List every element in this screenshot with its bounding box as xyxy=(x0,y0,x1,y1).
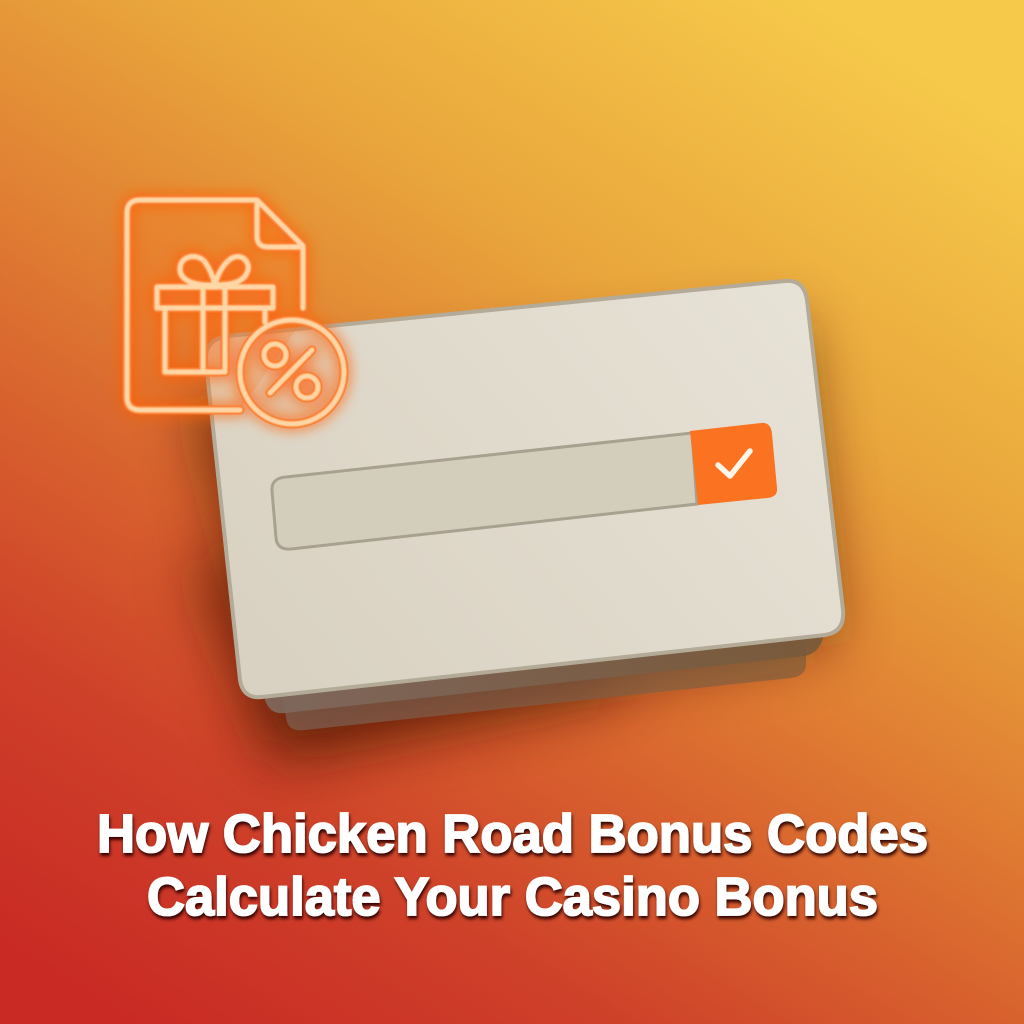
icon glow interior tint xyxy=(127,200,344,424)
title: How Chicken Road Bonus Codes xyxy=(97,804,928,864)
confirm button xyxy=(690,423,777,505)
icon: check mark xyxy=(718,451,750,476)
icon part: document outline xyxy=(127,200,303,410)
title xyxy=(97,804,928,927)
input field xyxy=(272,433,697,549)
stacked card layer: back xyxy=(270,600,806,730)
icon: glowing document with gift and percent badge xyxy=(127,200,344,424)
main card xyxy=(206,281,843,697)
icon part: percent badge xyxy=(240,320,344,424)
title: Calculate Your Casino Bonus xyxy=(147,867,878,927)
icon part: gift box xyxy=(157,257,273,372)
stacked card layer: middle xyxy=(255,600,824,713)
card stack shadow xyxy=(185,320,835,765)
